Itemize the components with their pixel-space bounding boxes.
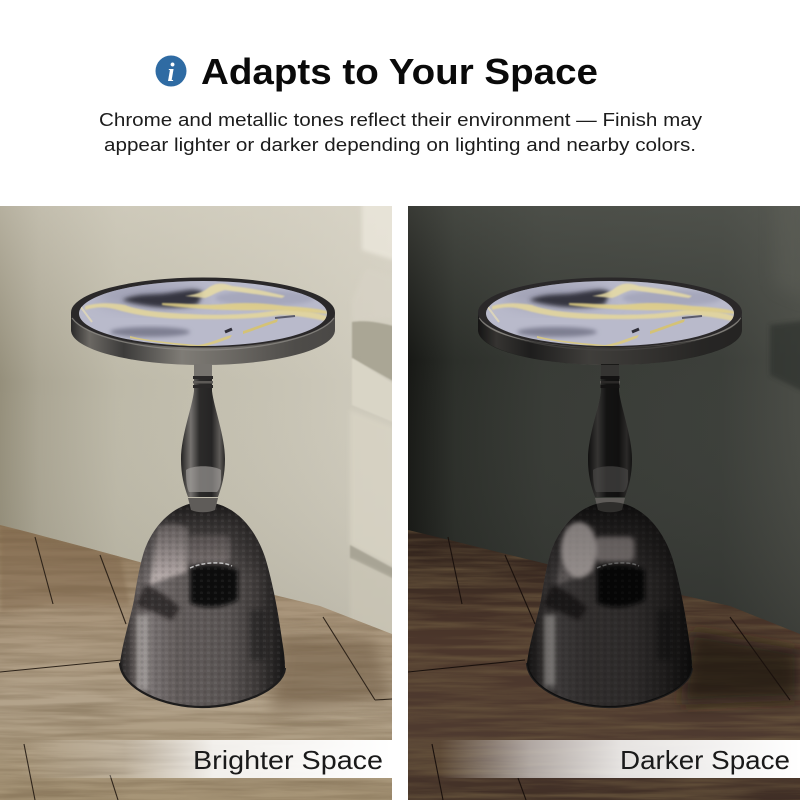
description text: appear lighter or darker depending on lighting and nearby colors.	[104, 135, 696, 155]
header icon: info badge	[156, 56, 186, 87]
caption: brighter space	[20, 740, 392, 778]
table: darker	[477, 275, 747, 715]
description text	[99, 110, 702, 155]
wall and shadow	[408, 190, 800, 646]
caption: darker space	[440, 740, 800, 778]
caption: darker space: Darker Space	[620, 745, 790, 775]
header icon: info badge: i	[167, 58, 175, 87]
panel: brighter space	[0, 190, 400, 800]
panel: darker space	[408, 190, 800, 800]
table: brighter	[70, 275, 340, 715]
description text: Chrome and metallic tones reflect their environment — Finish may	[99, 110, 702, 130]
wood floor	[0, 520, 392, 800]
title: Adapts to Your Space	[201, 51, 598, 92]
caption: brighter space: Brighter Space	[193, 745, 383, 775]
wall and window light	[0, 190, 400, 646]
wood floor	[408, 520, 800, 800]
